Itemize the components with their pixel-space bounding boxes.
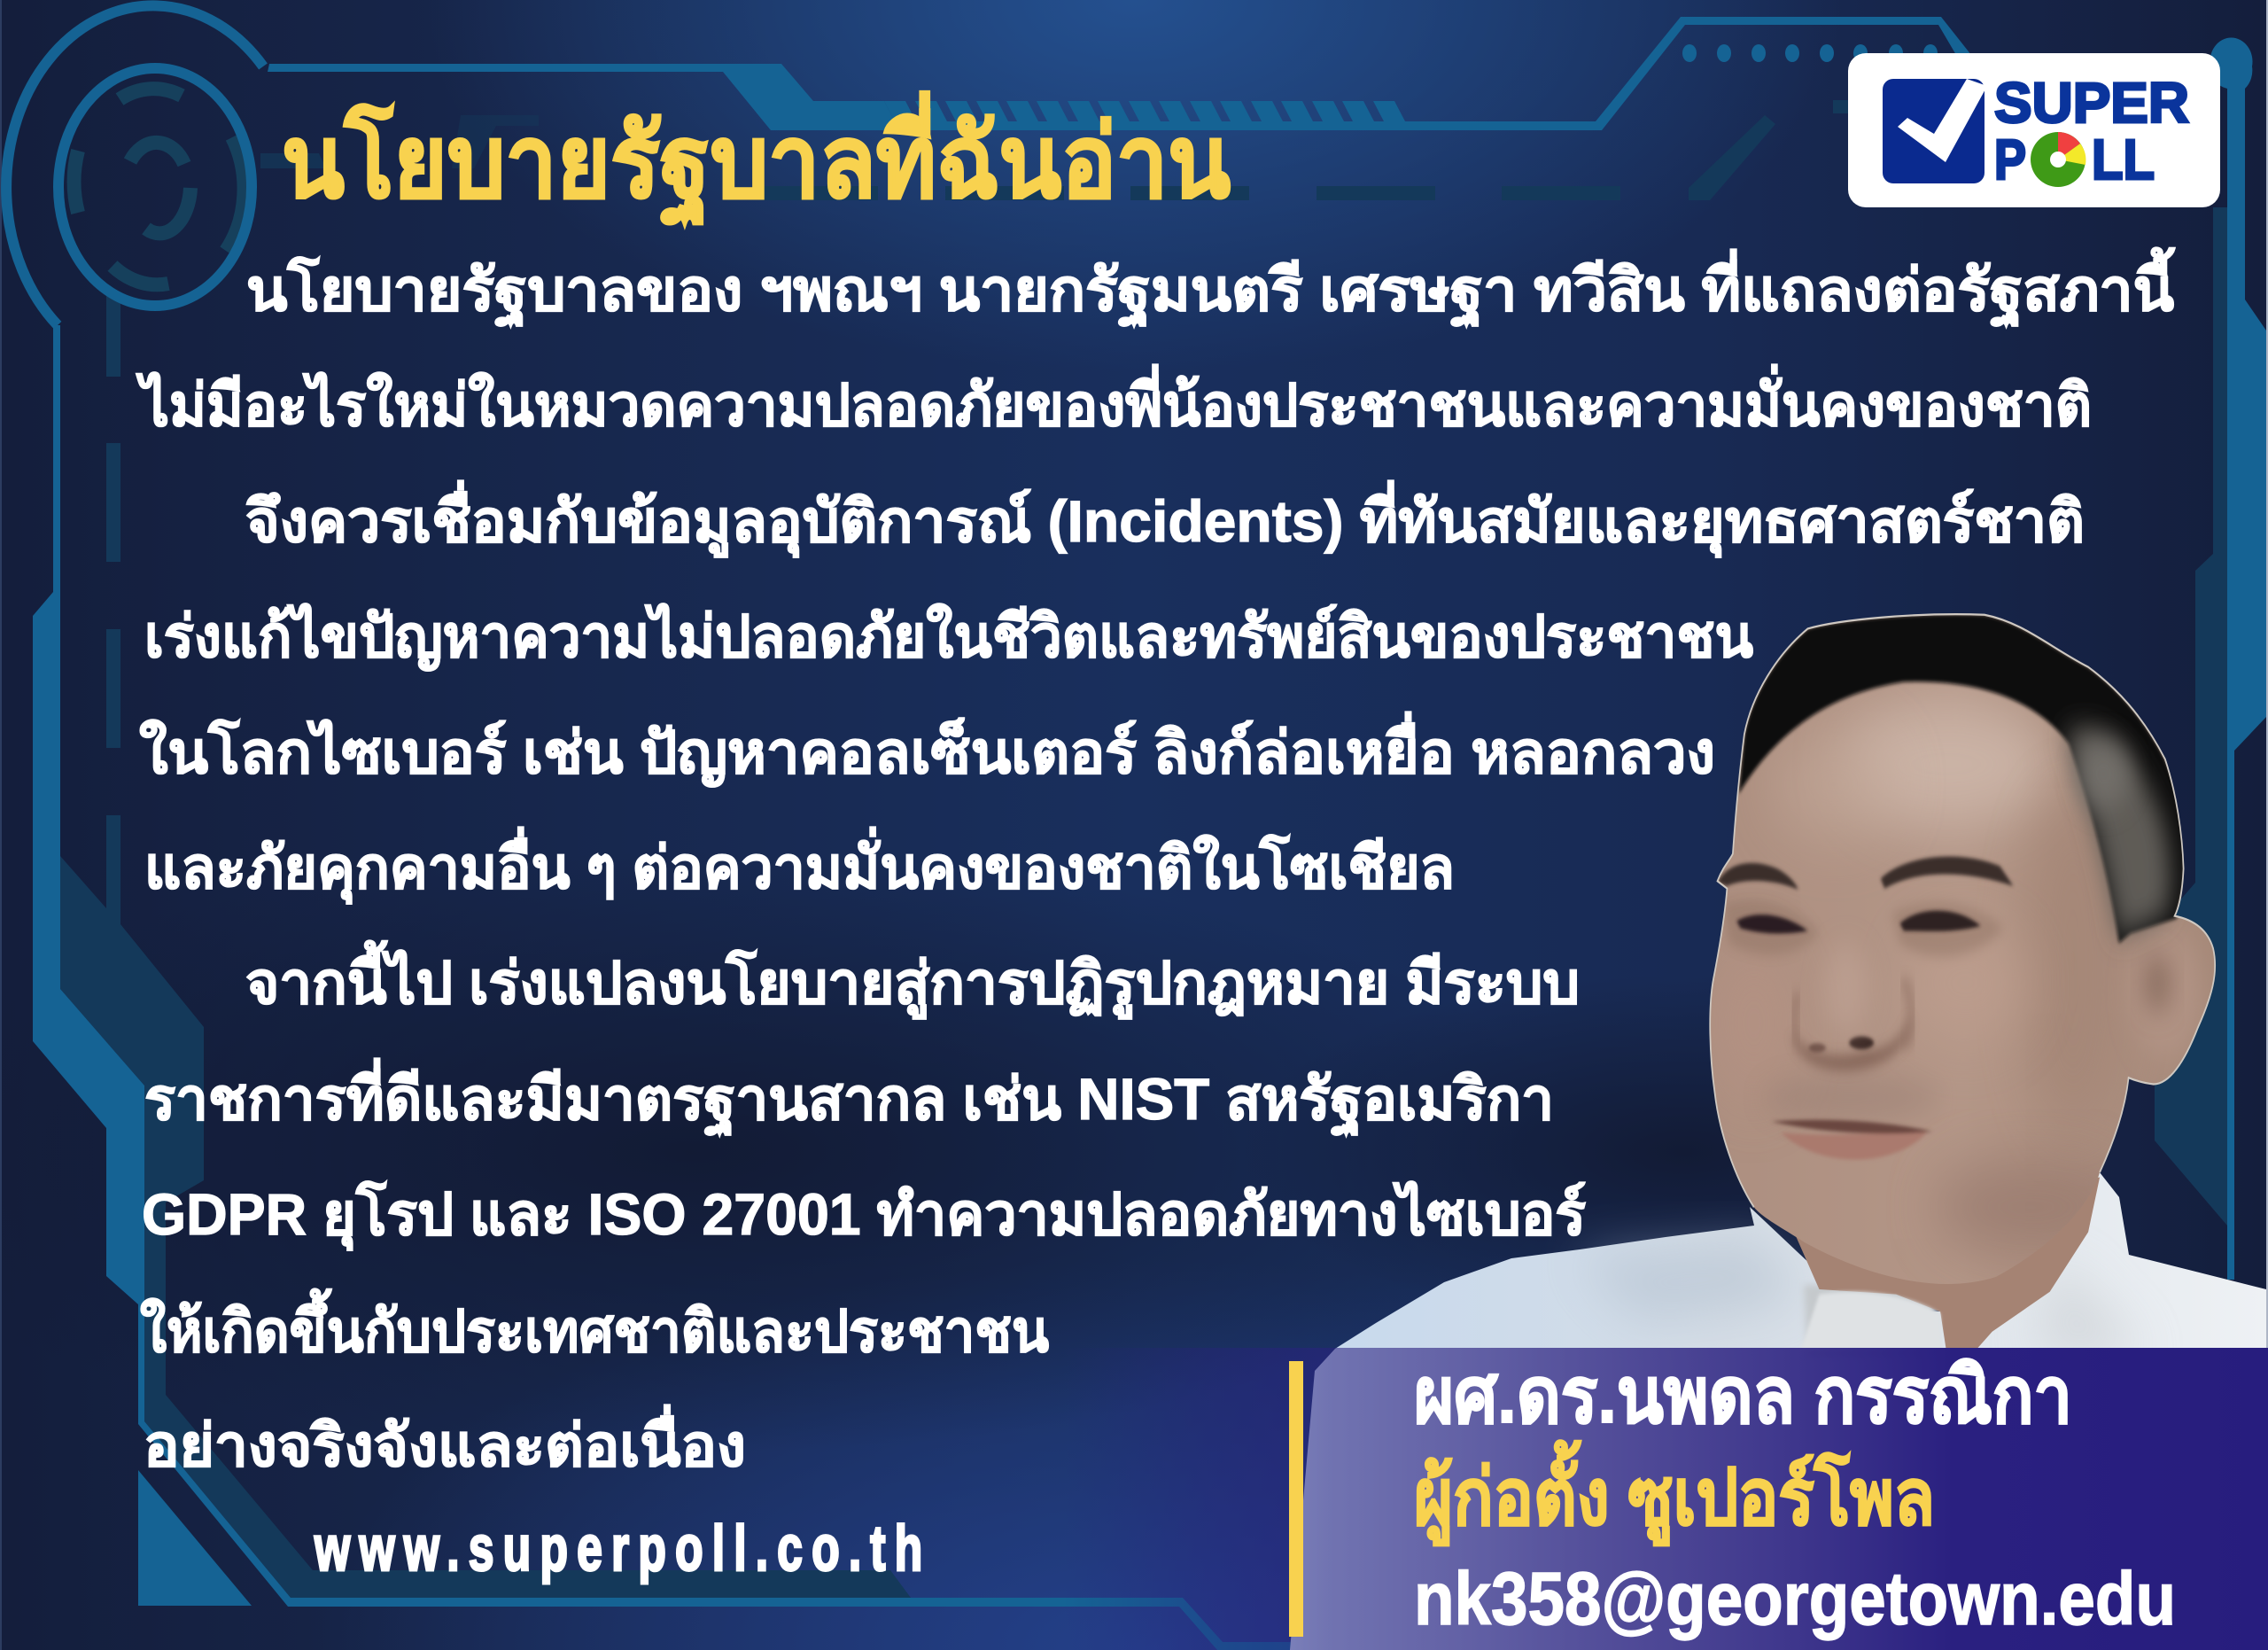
shirt [1290,1172,2266,1650]
face shading [1712,699,2200,1252]
author email: nk358@georgetown.edu [1414,1557,2176,1640]
website url: www.superpoll.co.th [314,1514,931,1584]
body text: ราชการที่ดีและมีมาตรฐานสากล เช่น NIST สหรัฐอเมริกา [144,1057,1554,1137]
logo wordmark: P [1994,128,2026,191]
body text: จากนี้ไป เร่งแปลงนโยบายสู่การปฏิรูปกฎหมาย มีระบบ [245,939,1580,1020]
logo wordmark: LL [2092,128,2155,191]
accent bar [1289,1361,1303,1637]
eyebrows [1718,857,2013,890]
body text: ในโลกไซเบอร์ เช่น ปัญหาคอลเซ็นเตอร์ ลิงก์ล่อเหยื่อ หลอกลวง [139,711,1715,787]
portrait [1290,614,2266,1650]
body text: ไม่มีอะไรใหม่ในหมวดความปลอดภัยของพี่น้องประชาชนและความมั่นคงของชาติ [136,363,2092,438]
mouth [1771,1120,1932,1160]
head [1710,614,2215,1284]
body text: นโยบายรัฐบาลของ ฯพณฯ นายกรัฐมนตรี เศรษฐา ทวีสิน ที่แถลงต่อรัฐสภานี้ [246,246,2176,328]
logo wordmark [1994,71,2189,191]
body text: และภัยคุกคามอื่น ๆ ต่อความมั่นคงของชาติในโซเชียล [144,826,1455,905]
logo: Super Poll [1848,53,2220,207]
author name: ผศ.ดร.นพดล กรรณิกา [1414,1351,2072,1439]
nose [1792,943,1912,1071]
logo check box [1883,79,1987,183]
body text: เร่งแก้ไขปัญหาความไม่ปลอดภัยในชีวิตและทรัพย์สินของประชาชน [144,602,1753,671]
head outline halo [1710,614,2215,1207]
body text: อย่างจริงจังและต่อเนื่อง [144,1404,746,1478]
hair [1738,614,2185,943]
eyes [1723,899,2004,957]
name panel [1063,1348,2268,1650]
title: นโยบายรัฐบาลที่ฉันอ่าน [282,91,1231,228]
body text: ให้เกิดขึ้นกับประเทศชาติและประชาชน [140,1288,1049,1364]
author role: ผู้ก่อตั้ง ซูเปอร์โพล [1414,1440,1935,1546]
logo pie [2031,132,2085,187]
logo wordmark: SUPER [1994,71,2189,135]
neck [1796,1178,2100,1351]
body text [136,246,2176,1478]
body text: GDPR ยุโรป และ ISO 27001 ทำความปลอดภัยทางไซเบอร์ [142,1179,1586,1251]
body text: จึงควรเชื่อมกับข้อมูลอุบัติการณ์ (Incidents) ที่ทันสมัยและยุทธศาสตร์ชาติ [245,479,2085,558]
